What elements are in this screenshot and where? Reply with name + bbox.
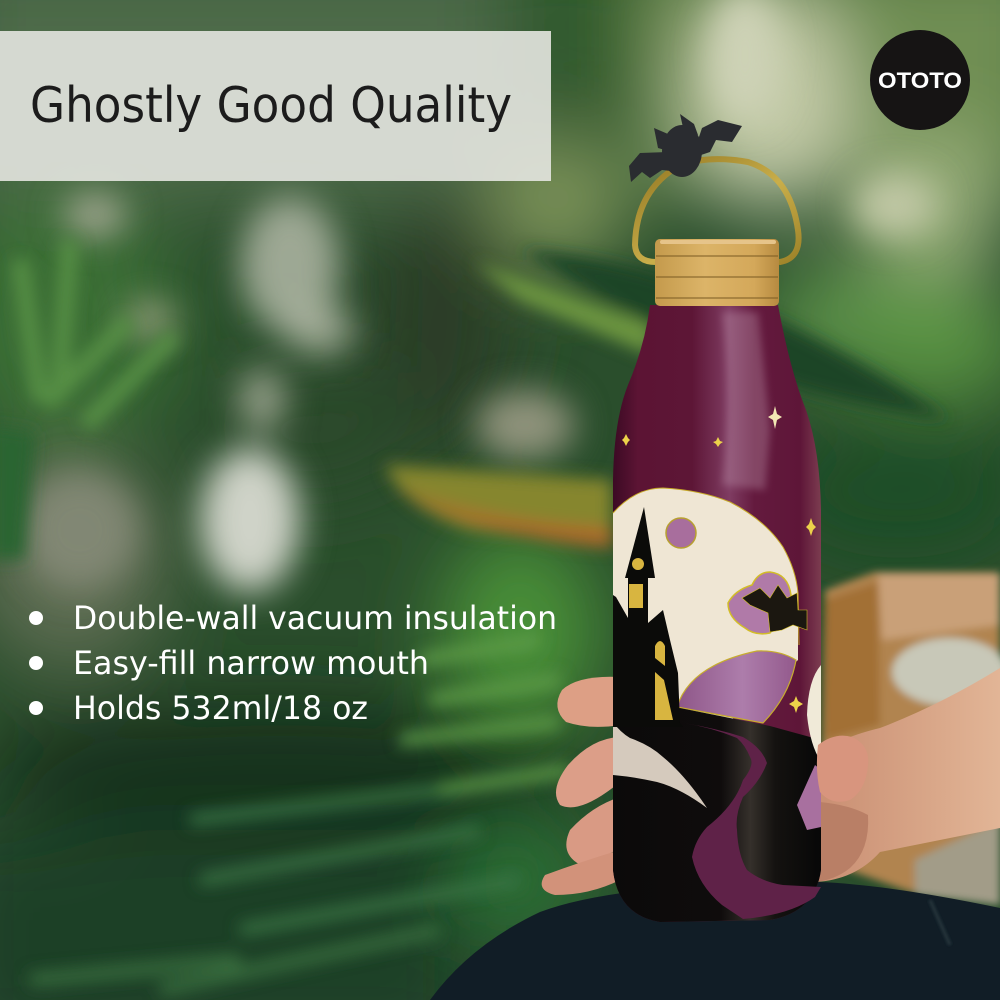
wooden crate background	[820, 572, 1000, 905]
fingers behind bottle	[542, 677, 620, 895]
purple cloud with bat	[728, 572, 791, 634]
bullet two: Easy-fill narrow mouth	[73, 644, 429, 682]
feature list	[29, 599, 557, 727]
bottle shine	[722, 312, 770, 490]
brand logo	[870, 30, 970, 130]
title banner	[0, 31, 551, 181]
bamboo lid	[655, 239, 779, 306]
bullet one: Double-wall vacuum insulation	[73, 599, 557, 637]
ghost	[807, 665, 821, 762]
tower windows	[629, 558, 673, 720]
moon scene	[613, 488, 807, 735]
dark trousers knee	[430, 882, 1000, 1000]
title text: Ghostly Good Quality	[30, 77, 512, 134]
flying bat	[742, 585, 807, 632]
grey path	[613, 722, 707, 808]
pumpkin shape	[797, 765, 821, 830]
brand logo: OTOTO	[878, 68, 962, 93]
forearm and thumb	[815, 668, 1000, 882]
bullet three: Holds 532ml/18 oz	[73, 689, 368, 727]
haunted house	[613, 507, 683, 727]
winding purple road	[683, 723, 821, 919]
bottle	[613, 305, 821, 922]
bottle body	[613, 305, 821, 922]
stars	[622, 406, 816, 713]
bat charm	[629, 114, 742, 182]
gold ring handle	[635, 159, 799, 262]
small purple moon	[666, 518, 696, 548]
thumb over bottle	[817, 736, 868, 802]
pink hill	[677, 651, 796, 723]
black ground	[613, 708, 821, 922]
